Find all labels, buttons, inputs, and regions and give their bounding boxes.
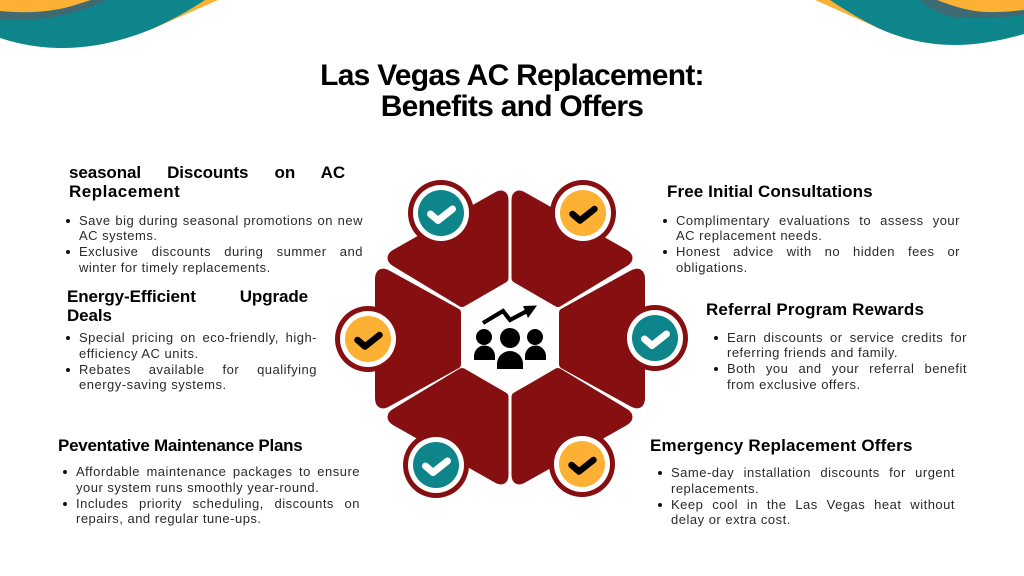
text: free consultations bullets bbox=[663, 212, 960, 275]
badge: left orange check bbox=[335, 306, 401, 372]
text: energy-efficient bullets: Rebates available for qualifying bbox=[79, 362, 317, 376]
text: free consultations bullets: obligations. bbox=[676, 260, 748, 275]
text: free consultations bullets: Honest advice with no hidden fees or bbox=[676, 244, 960, 259]
text: maintenance bullets bbox=[63, 464, 360, 526]
text: energy-efficient bullets: Special pricing on eco-friendly, high- bbox=[79, 330, 317, 345]
petal: bottom right bbox=[516, 373, 628, 479]
heading: energy-efficient deals: Deals bbox=[67, 306, 112, 325]
heading: preventative maintenance: Peventative Maintenance Plans bbox=[58, 436, 302, 455]
heading: free consultations: Free Initial Consultations bbox=[667, 182, 873, 201]
text: maintenance bullets: Affordable maintenance packages to ensure bbox=[76, 464, 360, 479]
text: seasonal discounts bullets: Save big during seasonal promotions on new bbox=[79, 212, 363, 228]
text: maintenance bullets: your system runs smoothly year-round. bbox=[76, 480, 319, 495]
text: energy-efficient bullets bbox=[66, 330, 317, 392]
text: emergency bullets: Same-day installation discounts for urgent bbox=[671, 465, 955, 480]
text: referral bullets: Earn discounts or service credits for bbox=[727, 330, 967, 344]
badge: bottom left teal check bbox=[403, 432, 469, 498]
petal: bottom left bbox=[392, 373, 504, 479]
title: Benefits and Offers bbox=[381, 90, 643, 123]
badge: top left teal check bbox=[408, 180, 474, 246]
text: seasonal discounts bullets bbox=[66, 212, 363, 275]
heading: seasonal discounts: Replacement bbox=[69, 182, 180, 201]
heading: energy-efficient deals: Energy-Efficient Upgrade bbox=[67, 287, 308, 306]
text: referral bullets: referring friends and family. bbox=[727, 345, 898, 360]
petal: top left bbox=[392, 196, 504, 302]
text: seasonal discounts bullets: AC systems. bbox=[79, 228, 157, 243]
text: maintenance bullets: Includes priority scheduling, discounts on bbox=[76, 496, 360, 510]
icon: team with rising arrow bbox=[474, 306, 546, 369]
text: emergency bullets: delay or extra cost. bbox=[671, 512, 791, 527]
heading: seasonal discounts: seasonal Discounts on AC bbox=[69, 163, 345, 182]
petal: right bbox=[564, 274, 640, 403]
text: emergency bullets bbox=[658, 465, 955, 527]
heading: energy-efficient deals bbox=[67, 287, 308, 325]
heading: referral rewards: Referral Program Rewards bbox=[706, 300, 924, 319]
text: energy-efficient bullets: energy-saving systems. bbox=[79, 377, 227, 392]
title: Las Vegas AC Replacement: bbox=[320, 58, 704, 92]
badge: right teal check bbox=[622, 305, 688, 371]
text: referral bullets: from exclusive offers. bbox=[727, 377, 861, 392]
title bbox=[320, 58, 704, 123]
petal: left bbox=[380, 274, 456, 403]
badge: top right orange check bbox=[550, 180, 616, 246]
heading: seasonal discounts bbox=[69, 163, 345, 201]
text: free consultations bullets: AC replacement needs. bbox=[676, 228, 822, 243]
text: seasonal discounts bullets: winter for timely replacements. bbox=[79, 260, 271, 275]
text: free consultations bullets: Complimentary evaluations to assess your bbox=[676, 212, 960, 228]
heading: emergency offers: Emergency Replacement Offers bbox=[650, 436, 913, 455]
text: maintenance bullets: repairs, and regular tune-ups. bbox=[76, 511, 262, 526]
text: emergency bullets: Keep cool in the Las Vegas heat without bbox=[671, 496, 955, 512]
text: referral bullets bbox=[714, 330, 967, 392]
text: seasonal discounts bullets: Exclusive discounts during summer and bbox=[79, 244, 363, 259]
text: emergency bullets: replacements. bbox=[671, 481, 759, 496]
petal: top right bbox=[516, 196, 628, 302]
text: referral bullets: Both you and your referral benefit bbox=[727, 361, 967, 376]
badge: bottom right orange check bbox=[549, 431, 615, 497]
text: energy-efficient bullets: efficiency AC units. bbox=[79, 346, 199, 361]
